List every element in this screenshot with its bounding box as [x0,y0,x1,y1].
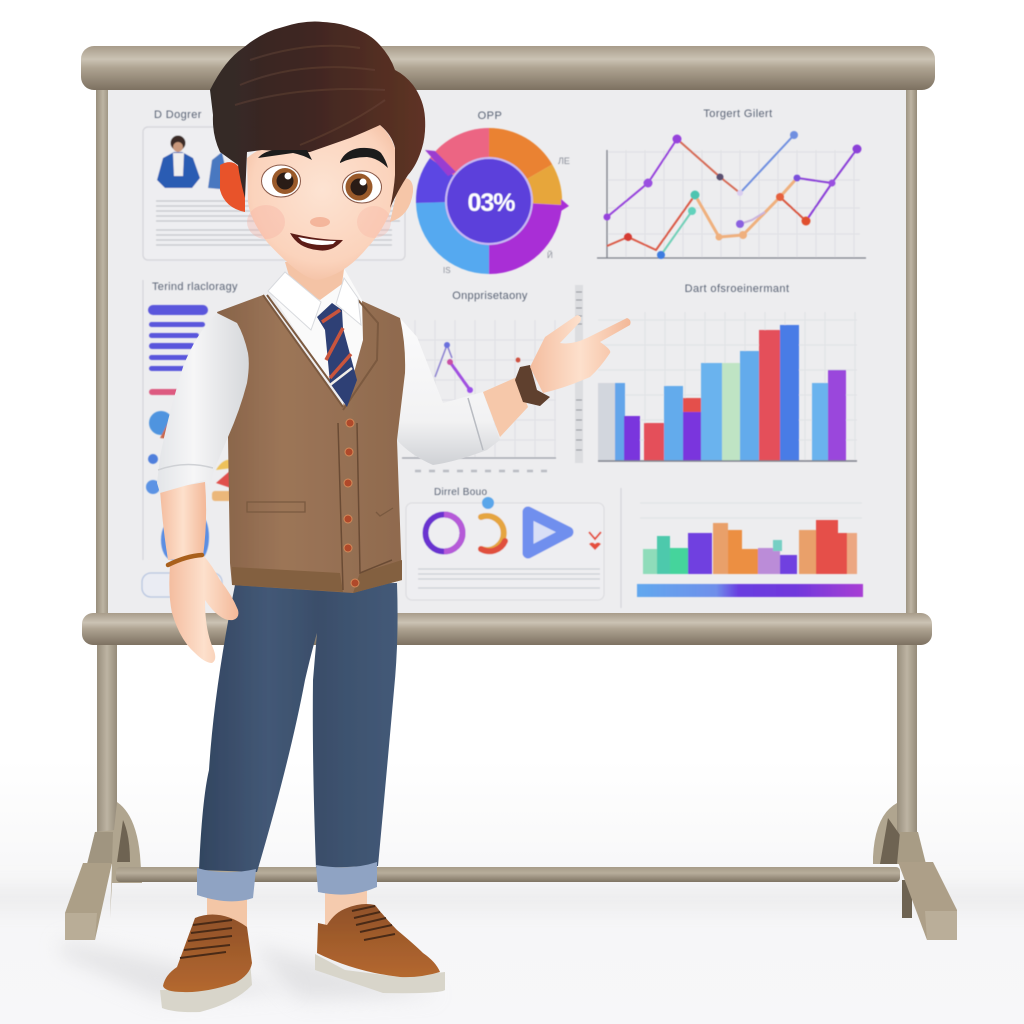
heading: icon row: Dirrel Bouo [434,487,487,498]
collar [268,272,321,330]
right foot bracket [873,803,957,940]
hair [210,22,425,208]
list bars [148,305,208,371]
small pie icons [146,411,236,560]
panel: donut chart: IS [443,266,451,275]
bars [598,325,846,461]
donut value: 03% [467,189,515,217]
right sleeve [397,318,500,465]
panel: donut chart: ЛЕ [558,156,570,166]
neck [285,262,345,300]
vest hem [232,560,402,593]
heading: line chart: Torgert Gilert [703,108,773,120]
donut segments [416,128,569,274]
panel: profile card [143,109,405,260]
left sleeve [157,313,249,493]
panel: centre mini line chart [402,285,583,471]
hair highlights [235,46,385,145]
trousers [199,583,398,872]
vest [217,295,405,593]
right hand [530,315,631,393]
trouser cuffs [197,862,377,901]
rounded label box [142,573,222,597]
text block: profile copy [156,201,400,245]
nose [310,217,330,227]
icon: orange arc [481,516,504,550]
left cuff fold [158,464,213,470]
heading: centre chart: Onpprisetaony [452,290,528,302]
vest buttons [344,419,359,587]
bracelet [168,555,202,565]
right cuff line [468,398,483,450]
cross bar [116,867,900,882]
stacked blocks [643,520,857,574]
left hand [169,555,238,663]
whiteboard surface [108,90,906,615]
panel: donut chart: Й [547,251,553,260]
top rail [81,46,935,90]
icon: second person [208,152,230,190]
panel: stacked bars [621,488,863,608]
text block: icon row copy [418,569,600,588]
left forearm [160,482,206,560]
ruler [575,285,583,463]
character: presenter [157,22,631,1012]
heading: left list: Terind rlacloragy [152,281,238,293]
data points [604,131,862,259]
vest pockets [247,502,393,516]
left ear [220,162,245,212]
panel: donut chart [416,110,570,275]
collar right [336,278,361,325]
vest lapels [263,295,378,410]
panel: bar chart [598,283,857,461]
shoe: left [160,915,252,1012]
right eyebrow [340,148,388,168]
heading: bar chart: Dart ofsroeinermant [685,283,789,295]
icon: play triangle [528,512,568,553]
gradient progress bar [637,584,863,597]
whiteboard stand frame [65,85,957,940]
grid [607,150,860,258]
face [247,125,397,280]
eye: right [342,171,382,203]
purple and red line [607,135,857,255]
mouth [290,233,343,251]
left eyebrow [258,150,312,160]
heading: OPP: OPP [478,110,502,122]
left ankle [207,895,247,930]
icon: ring [426,514,462,552]
panel: line chart [597,108,866,259]
eye: left [262,165,300,197]
panel: left data list [142,280,238,597]
icon: heart [589,532,601,550]
watch [515,365,550,406]
icon: person in blue suit [157,136,200,188]
right ear [390,178,413,222]
right ankle [325,888,367,926]
panel: icon row [406,487,604,600]
heading: profile: D Dogrer [154,109,202,121]
shoe: right [315,904,445,993]
necktie [317,303,357,407]
mini line series [435,345,470,390]
icon: blue dot [482,497,494,509]
shirt front [270,268,363,405]
vest placket [338,423,392,590]
right forearm [483,377,528,437]
bottom rail [82,613,932,645]
left foot bracket [65,802,142,940]
